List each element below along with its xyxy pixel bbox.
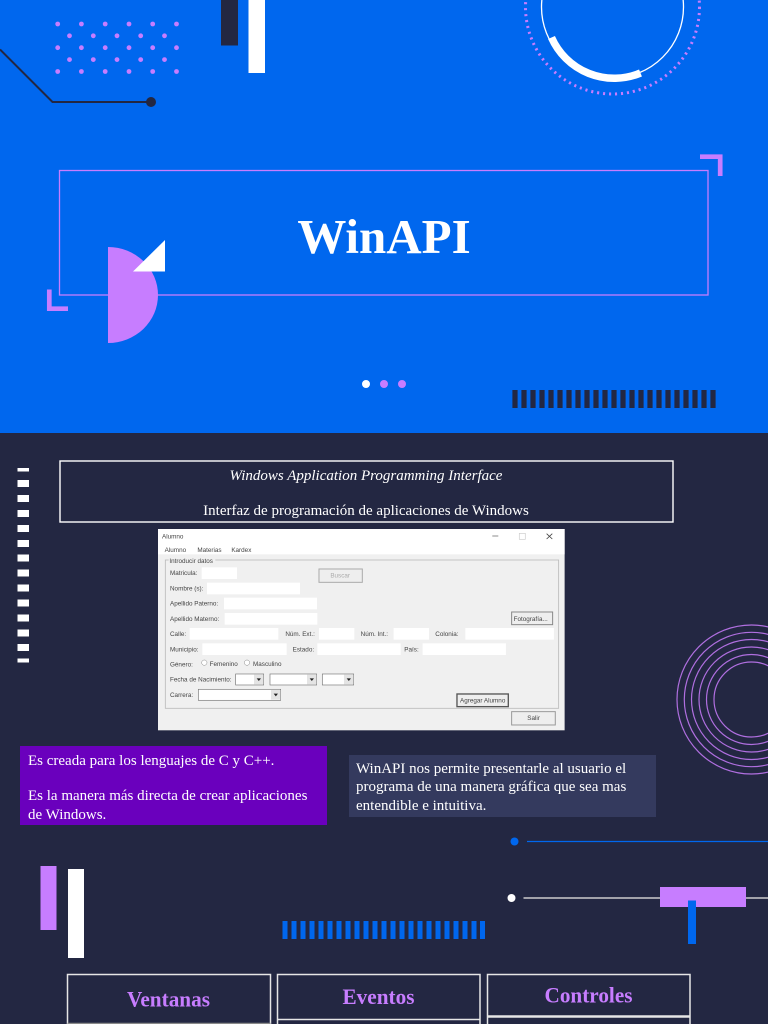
table column: Controles: Controles <box>544 983 633 1008</box>
screenshot: Alumno window form: Materias <box>197 547 222 554</box>
screenshot: Alumno window form: Agregar Alumno <box>460 697 506 704</box>
screenshot: Alumno window form <box>158 529 565 730</box>
callout: slate description note: WinAPI nos permite presentarle al usuario el <box>356 761 626 777</box>
callout: purple languages note <box>20 746 327 825</box>
panel: dark content slide background <box>0 433 768 1024</box>
screenshot: Alumno window form: Femenino <box>210 661 238 668</box>
callout: purple languages note: Es la manera más directa de crear aplicaciones <box>28 788 308 804</box>
concentric circles <box>677 625 768 774</box>
screenshot: Alumno window form: Kardex <box>231 547 252 554</box>
title frame <box>60 170 708 295</box>
title: WinAPI <box>297 209 471 264</box>
blue striped bar <box>285 921 482 939</box>
screenshot: Alumno window form: Buscar <box>330 573 350 580</box>
screenshot: Alumno window form: Núm. Ext.: <box>285 631 315 638</box>
screenshot: Alumno window form: Apellido Paterno: <box>170 601 218 608</box>
screenshot: Alumno window form: Fotografía... <box>514 616 548 623</box>
callout: slate description note <box>349 755 656 817</box>
screenshot: Alumno window form: Género: <box>170 662 193 669</box>
callout: purple languages note: de Windows. <box>28 807 106 823</box>
panel: blue title slide background <box>0 0 768 433</box>
screenshot: Alumno window form: Carrera: <box>170 692 193 699</box>
screenshot: Alumno window form: Fecha de Nacimiento: <box>170 677 232 684</box>
callout: slate description note: entendible e intuitiva. <box>356 798 486 814</box>
callout: slate description note: programa de una manera gráfica que sea mas <box>356 779 626 795</box>
screenshot: Alumno window form: Alumno <box>165 547 187 554</box>
decorative top bars <box>221 0 265 73</box>
table column: Controles <box>488 974 690 1024</box>
screenshot: Alumno window form: Colonia: <box>435 631 459 638</box>
vertical white dashes left <box>18 468 29 662</box>
heading box: definition <box>60 461 673 522</box>
table column: Ventanas <box>68 974 270 1024</box>
table column: Ventanas: Ventanas <box>127 986 210 1012</box>
screenshot: Alumno window form: Alumno <box>162 533 184 540</box>
connector line with end dot <box>0 50 156 107</box>
table column: Eventos <box>278 974 480 1024</box>
screenshot: Alumno window form: Masculino <box>253 661 282 668</box>
pagination dots <box>362 380 406 388</box>
heading box: definition: Windows Application Programming Interface <box>230 468 503 484</box>
screenshot: Alumno window form: Calle: <box>170 631 186 638</box>
corner bracket top right <box>700 157 720 176</box>
screenshot: Alumno window form: Nombre (s): <box>170 585 204 592</box>
half circle and triangle shape <box>108 240 165 343</box>
screenshot: Alumno window form: Introducir datos <box>169 558 213 565</box>
table column: Eventos: Eventos <box>342 984 415 1009</box>
screenshot: Alumno window form: Apellido Materno: <box>170 616 219 623</box>
screenshot: Alumno window form: Matricula: <box>170 570 198 577</box>
dark striped bar <box>515 390 713 408</box>
white connector line with purple and blue blocks <box>508 887 768 944</box>
callout: purple languages note: Es creada para los lenguajes de C y C++. <box>28 753 274 769</box>
heading box: definition: Interfaz de programación de aplicaciones de Windows <box>203 503 529 519</box>
screenshot: Alumno window form: Municipio: <box>170 646 199 653</box>
screenshot: Alumno window form: Salir <box>527 715 540 722</box>
screenshot: Alumno window form: Núm. Int.: <box>361 631 388 638</box>
vertical bars lower left <box>40 866 84 958</box>
circle ornament: ring, thick arc and dotted ring <box>526 0 700 94</box>
screenshot: Alumno window form: Estado: <box>293 646 314 653</box>
blue connector line with dot <box>510 838 768 846</box>
corner bracket bottom left <box>49 290 68 309</box>
dot grid pattern <box>55 22 179 74</box>
screenshot: Alumno window form: País: <box>404 646 419 653</box>
